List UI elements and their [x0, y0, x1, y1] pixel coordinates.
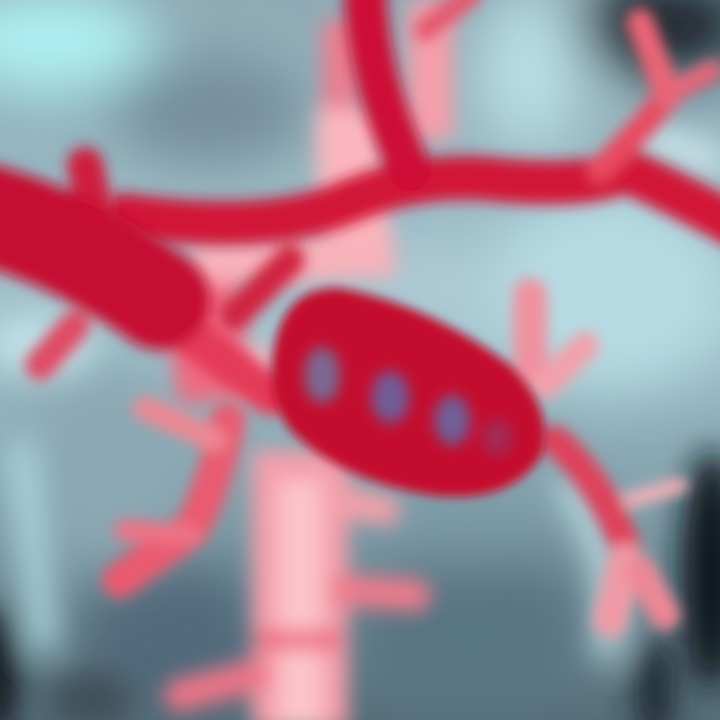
red branching arteries [125, 0, 720, 315]
blood clot capsule [271, 288, 545, 497]
clot cells [304, 347, 512, 455]
lower left branch [120, 408, 228, 580]
lower right branch [555, 440, 680, 620]
pink central vessel [180, 450, 415, 720]
upper right pink twigs [530, 295, 585, 385]
thick left artery [0, 165, 270, 395]
pink upper vessel [190, 0, 430, 400]
